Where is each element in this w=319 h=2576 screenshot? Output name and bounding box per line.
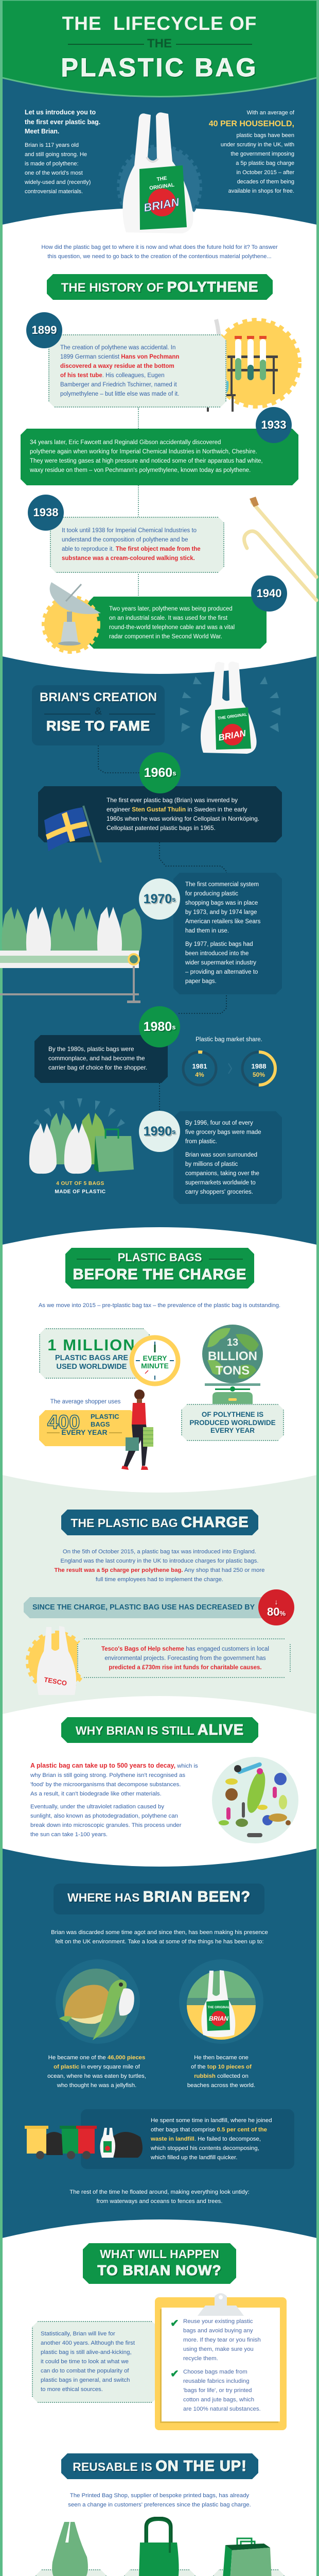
caption: 4 out of 5 bags: MADE OF PLASTIC [55,1189,106,1195]
stat: 13 billion tons globe: 13 [227,1337,238,1348]
chart: market share donuts: 1981 [192,1062,207,1070]
heading: Brian's creation & rise to fame: & [95,706,102,717]
text: of his test tube. His colleagues, Eugen [60,372,165,379]
text: which filled up the landfill quicker. [151,2155,237,2161]
text: carry shoppers' groceries. [185,1189,253,1195]
question text [41,244,278,260]
text: another 400 years. Although the first [41,2340,135,2346]
panel: clipboard tips: Choose bags made from [183,2369,247,2375]
text: average shopper: The average shopper uses [50,1399,120,1405]
text: plastic bags in general, and switch [41,2377,130,2383]
text: 1899 German scientist Hans von Pechmann [60,354,179,360]
text: The first ever plastic bag (Brian) was invented by [107,796,238,804]
icon: clock every minute: MINUTE [141,1362,169,1370]
text: to more ethical sources. [41,2386,103,2393]
text: had them in use. [185,928,229,934]
text: polymethylene – but little else was made of it. [60,391,179,397]
year: 1938 [28,495,64,531]
text: on an industrial scale. It was used for the first [109,615,227,621]
text: charge intro: The result was a 5p charge per polythene bag. Any shop that had 250 or more [55,1567,264,1573]
text: waste in landfill. He failed to decompose, [151,2136,261,2142]
panel: clipboard tips: 'bags for life', or try printed [183,2387,252,2394]
text: Bamberger and Friedrich Tschirner, named it [60,382,177,388]
year: 1940: 1940 [257,587,281,600]
text: the sun can take 1-100 years. [30,1832,108,1838]
intro left text: controversial materials. [25,189,83,195]
heading: Brian's creation & rise to fame: RISE TO FAME [46,718,150,734]
text: floated around: from waterways and oceans to fences and trees. [96,2198,223,2205]
text: carrier bag of choice for the shopper. [48,1064,147,1071]
stat: 13 billion tons globe: TONS [216,1364,250,1378]
stat: polythene produced: PRODUCED WORLDWIDE [189,1419,276,1426]
icon: Brian the bag (intro) [117,112,202,233]
heading: Brian's creation & rise to fame [32,685,165,745]
text: round-the-world telephone cable and was a vital [109,624,235,631]
panel: 1960s [38,786,282,842]
panel: 1938 [50,517,224,573]
text: decay: As a result, it can't biodegrade like other materials. [30,1791,162,1797]
text: beach caption [187,2055,255,2089]
text: for producing plastic [185,891,238,897]
heading: plastic bags before the charge [65,1248,254,1289]
heading: reusable is on the up: REUSABLE IS ON THE UP! [73,2458,247,2475]
text: can do to combat the popularity of [41,2368,129,2374]
heading: reusable is on the up [61,2453,258,2479]
panel: 1990s [173,1111,282,1204]
text: where intro [51,1929,268,1945]
stat: 400 bags [39,1410,137,1446]
stat: 400 bags: PLASTIC [91,1413,119,1420]
text: – providing an alternative to [185,969,258,975]
intro right text: in October 2015 – after [236,170,294,176]
intro left text: Meet Brian. [25,128,59,135]
text: floated around [69,2189,250,2205]
text: been introduced into the [185,951,249,957]
text: predicted a £730m rise int funds for charitable causes. [109,1665,262,1671]
text: where intro: felt on the UK environment. Take a look at some of the things he has been up to: [55,1939,264,1945]
text: Two years later, polythene was being produced [109,606,233,612]
text: shopping bags was in place [185,900,258,906]
text: pre-tax intro: As we move into 2015 – pre-tplastic bag tax – the prevalence of the plastic bag is outstanding. [39,1302,280,1309]
year: 1899 [26,312,62,348]
text: Statistically, Brian will live for [41,2331,115,2337]
text: where intro: Brian was discarded some time agot and since then, has been making his presence [51,1929,268,1936]
title: THE LIFECYCLE OF [62,13,257,34]
heading: why Brian is still alive [61,1717,258,1743]
intro left text: the first ever plastic bag. [25,118,100,126]
stat: polythene produced: OF POLYTHENE IS [202,1411,263,1418]
text: By 1996, four out of every [185,1120,253,1126]
text: decay: A plastic bag can take up to 500 years to decay, which is [30,1762,198,1769]
intro right text: With an average of [247,110,294,116]
text: companions, taking over the [185,1171,259,1177]
year: 1990s: 1990 [144,1124,172,1139]
text: The creation of polythene was accidental. In [60,345,175,351]
question text: this question, we need to go back to the creation of the contentious material polythene... [47,253,272,260]
text: by 1973, and by 1974 large [185,909,257,916]
panel: clipboard tips [155,2297,287,2430]
illustration: conveyor belt of bags [0,907,142,1003]
illustration: bag on beach: THE ORIGINAL [208,2006,230,2009]
tip 1: ✔ [170,2318,179,2329]
chart: market share donuts [182,1037,277,1087]
intro right text [209,110,294,194]
illustration: bins [25,2126,143,2159]
panel: 1933 [21,429,298,485]
text: understand the composition of polythene and be [62,537,188,543]
heading: plastic bags before the charge: BEFORE THE CHARGE [73,1266,246,1283]
icon: Swedish flag [44,806,102,862]
icon: Brian the bag (intro): ORIGINAL [149,182,175,191]
illustration: bag on beach: BRIAN [209,2015,228,2022]
intro right text: under scrutiny in the UK, with [221,142,294,148]
title: PLASTIC BAG [61,53,258,82]
text: decay [30,1762,198,1797]
intro left text: one of the world's most [25,170,83,176]
stat bar: decreased by 80% [24,1597,271,1618]
panel: 1980s [34,1035,168,1083]
year: 1990s: s [172,1127,175,1136]
icon: Brian the bag (intro): THE [156,176,168,182]
stat: 13 billion tons globe: BILLION [208,1349,257,1363]
text: wider supermarket industry [185,960,256,966]
intro right text: the government imposing [231,151,294,157]
caption: 4 out of 5 bags: 4 OUT OF 5 BAGS [56,1181,104,1187]
heading: plastic bags before the charge: PLASTIC BAGS [118,1251,202,1264]
illustration: 4 out of 5 bags [29,1098,134,1174]
panel: clipboard tips: Reuse your existing plastic [183,2318,253,2325]
text: beach caption: of the top 10 pieces of [191,2064,252,2070]
icon: Brian bag (creation) [180,662,280,754]
text: decay: why Brian is still going strong. Polythene isn't recognised as [30,1772,185,1778]
panel: clipboard tips: cotton and jute bags, which [183,2397,254,2403]
text: 80% [267,1605,286,1618]
intro left text: and still going strong. He [25,151,87,158]
text: ↓ [275,1597,278,1605]
intro right text: decades of them being [237,179,294,185]
stat: paper carrier bags [213,2569,285,2576]
text: beach caption: He then became one [194,2055,249,2061]
title [61,13,258,82]
panel: 1899 [48,334,226,408]
illustration: bag on beach [179,1959,263,2044]
connectors [98,745,227,1110]
illustration: turtle [56,1959,140,2044]
text: substance was a cream-coloured walking stick. [62,555,195,562]
text: 1960s when he was working for Celloplast in Norrköping. [107,815,259,822]
illustration: test tubes [207,318,302,412]
heading: what will happen to Brian now: WHAT WILL HAPPEN [100,2247,219,2261]
heading: what will happen to Brian now [83,2243,236,2284]
text: paper bags. [185,978,217,985]
icon: Brian the bag (intro): BRIAN [143,195,181,214]
text: environmental projects. Forecasting from the government has [104,1655,266,1662]
chart: market share donuts: 4% [195,1071,204,1078]
heading: history of polythene [47,274,273,300]
text: floated around: The rest of the time he floated around, making everything look untidy: [69,2189,250,2195]
stat: 1 million: USED WORLDWIDE [57,1363,127,1371]
text: Eventually, under the ultraviolet radiation caused by [30,1804,164,1810]
year: 1980s [139,1006,180,1047]
text: charge intro: On the 5th of October 2015, a plastic bag tax was introduced into England. [63,1549,256,1555]
text: plastic bag is still alive-and-kicking, [41,2349,132,2355]
year: 1960s [139,752,181,793]
panel: 1940 [87,597,267,649]
icon: clock every minute: EVERY [143,1354,167,1362]
text: turtle caption: He became one of the 46,000 pieces [48,2055,145,2061]
text: polythene again when working for Imperial Chemical Industries in Northwich, Cheshire. [30,449,257,455]
illustration: microbes [212,1757,298,1843]
text: The first commercial system [185,882,259,888]
text: from plastic. [185,1139,217,1145]
text: radar component in the Second World War. [109,634,222,640]
text: turtle caption: who thought he was a jellyfish. [57,2082,136,2089]
text: other bags that comprise 0.5 per cent of the [151,2127,267,2133]
stat: polythene produced: EVERY YEAR [210,1427,255,1434]
text: five grocery bags were made [185,1129,261,1136]
text: Celloplast patented plastic bags in 1965. [107,824,216,832]
panel: clipboard tips: bags and avoid buying any [183,2328,253,2334]
icon: Brian bag (creation): BRIAN [218,728,247,743]
stat: plastic carrier bags [36,2569,107,2576]
text: printed bag shop: seen a change in customers' preferences since the plastic bag charge. [68,2502,251,2508]
year: 1933 [256,407,292,443]
text: engineer Sten Gustaf Thulin in Sweden in the early [107,806,247,813]
heading: Brian's creation & rise to fame: BRIAN'S CREATION [40,690,157,704]
heading: history of polythene: THE HISTORY OF POLYTHENE [61,279,258,295]
stat: polythene produced [181,1404,284,1441]
intro left text: is made of polythene: [25,161,79,167]
text: decay: 'food' by the microorganisms that decompose substances. [30,1782,181,1788]
text: supermarkets worldwide to [185,1180,256,1186]
stat: 13 billion tons globe [202,1325,263,1404]
year: 1980s: s [172,1023,175,1030]
year: 1960s: s [172,769,176,777]
panel: clipboard tips: more. If they tear or you finish [183,2337,261,2343]
text: By 1977, plastic bags had [185,941,253,947]
intro left text: Let us introduce you to [25,109,96,116]
heading: where has Brian been: WHERE HAS BRIAN BEEN? [67,1889,251,1905]
stat: 400 bags: BAGS [91,1420,110,1428]
text: beach caption: rubbish collected on [194,2073,249,2079]
text: charge intro [55,1549,264,1583]
icon: Tesco bag: TESCO [43,1675,67,1687]
year: 1960s: 1960 [144,766,172,780]
panel: statistically [32,2321,158,2403]
heading: why Brian is still alive: WHY BRIAN IS STILL ALIVE [76,1722,244,1738]
year: 1970s: s [172,895,175,903]
intro right text: available in shops for free. [228,188,294,194]
year: 1940 [251,575,287,612]
icon: Brian bag (creation): THE ORIGINAL [218,712,247,721]
caption: 4 out of 5 bags [55,1181,106,1195]
panel: 1970s [173,873,282,994]
text: discovered a waxy residue at the bottom [60,363,174,369]
text: sunlight, also known as photodegradation, polythene can [30,1813,178,1819]
heading: what will happen to Brian now: TO BRIAN NOW? [97,2262,222,2278]
text: turtle caption: of plastic in every square mile of [54,2064,140,2070]
text: by millions of plastic [185,1161,238,1167]
year: 1938: 1938 [33,506,58,519]
stat: 400 bags: 400 [47,1412,80,1433]
stat: 400 bags: EVERY YEAR [61,1428,108,1436]
text: charge intro: England was the last country in the UK to introduce charges for plastic bags. [61,1558,258,1564]
icon: satellite dish [42,582,101,654]
text: turtle caption [47,2055,146,2089]
chart: market share donuts: Plastic bag market share. [196,1037,262,1043]
text: By the 1980s, plastic bags were [48,1045,134,1053]
text: It took until 1938 for Imperial Chemical Industries to [62,528,197,534]
year: 1990s [139,1111,180,1152]
timeline connector [138,408,139,624]
stat: flexi loop bags for life [124,2569,196,2576]
stat: 1 million: PLASTIC BAGS ARE [55,1354,128,1362]
icon: clip [198,2293,244,2316]
intro right text: plastic bags have been [236,132,294,139]
text: printed bag shop [68,2493,251,2508]
intro right text: 40 PER HOUSEHOLD, [209,120,294,128]
stat: 1 million: 1 MILLION [47,1336,136,1354]
text: Tesco's Bags of Help scheme has engaged customers in local [101,1646,269,1652]
text: They were testing gases at high pressure and noticed some of their apparatus had white, [30,458,263,464]
text: He spent some time in landfill, where he joined [151,2117,272,2124]
stat: 1 million [39,1328,150,1379]
tip 2: ✔ [170,2368,179,2380]
text: American retailers like Sears [185,919,260,925]
panel: clipboard tips: are 100% natural substances. [183,2406,261,2412]
heading: where has Brian been [54,1884,264,1914]
heading: the plastic bag charge [61,1510,258,1535]
text: turtle caption: ocean, where he was eaten by turtles, [47,2073,146,2079]
illustration: walking stick [242,497,318,602]
year: 1980s: 1980 [144,1019,172,1033]
text: 34 years later, Eric Fawcett and Reginald Gibson accidentally discovered [30,439,221,446]
title: THE [147,37,172,50]
year: 1970s: 1970 [144,891,172,906]
year: 1970s [139,878,180,920]
intro left text [25,109,100,195]
text: commonplace, and had become the [48,1055,145,1062]
text: waxy residue on them – von Pechmann's polymethylene, known today as polythene. [30,467,251,473]
intro right text: a 5p plastic bag charge [236,160,294,166]
text: printed bag shop: The Printed Bag Shop, supplier of bespoke printed bags, has already [70,2493,249,2499]
year: 1899: 1899 [32,324,57,336]
icon: Tesco bag [26,1626,82,1695]
intro left text: Brian is 117 years old [25,142,79,148]
stat bar: decreased by 80%: SINCE THE CHARGE, PLASTIC BAG USE HAS DECREASED BY [32,1603,255,1612]
intro left text: widely-used and (recently) [25,179,91,185]
question text: How did the plastic bag get to where it is now and what does the future hold for it? To answer [41,244,278,250]
panel: clipboard tips: reusable fabrics including [183,2378,250,2384]
text: it could be time to look at what we [41,2359,129,2365]
text: which stopped his contents decomposing, [151,2145,259,2151]
chart: market share donuts: 1988 [252,1062,266,1070]
year: 1933: 1933 [261,418,286,431]
chart: market share donuts: 50% [253,1071,265,1078]
panel: Tesco bags of help [77,1638,291,1678]
panel: clipboard tips: recycle them. [183,2355,218,2362]
text: beach caption: beaches across the world. [187,2082,255,2089]
text: break down into microscopic granules. This process under [30,1822,182,1828]
icon: shopper woman [121,1389,153,1470]
text: able to reproduce it. The first object made from the [62,546,201,552]
text: charge intro: full time employees had to implement the charge. [96,1577,223,1583]
panel: landfill [81,2109,294,2169]
heading: the plastic bag charge: THE PLASTIC BAG CHARGE [70,1514,249,1531]
icon: clock every minute [130,1335,180,1386]
panel: clipboard tips: using them, make sure you [183,2346,254,2352]
text: Brian was soon surrounded [185,1152,257,1158]
